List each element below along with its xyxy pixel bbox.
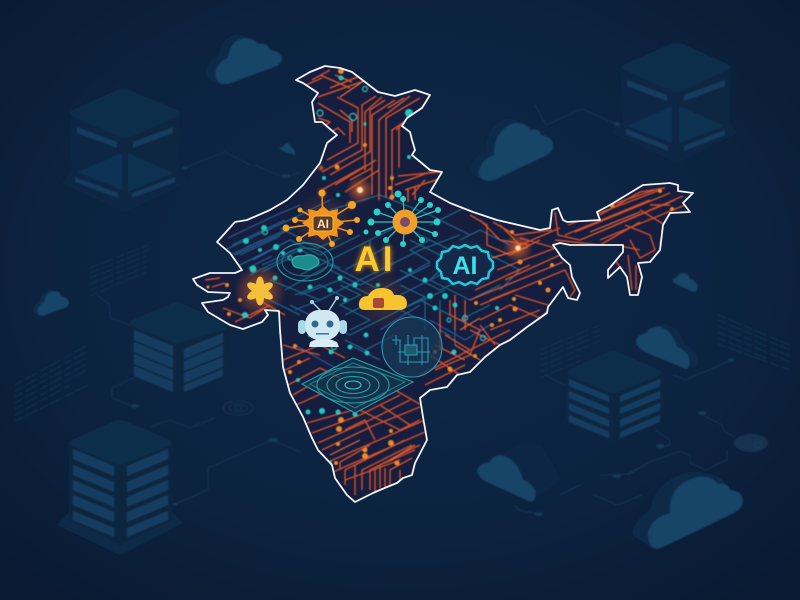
background server: top left [62, 89, 187, 212]
orange traces: western coast and south [205, 278, 430, 495]
background server: lower right [567, 351, 663, 443]
background server: middle left [130, 302, 227, 393]
ring circuit nodes [261, 85, 487, 351]
icon: teal network node with orange core [364, 190, 441, 247]
orange traces: east and north-east [420, 188, 685, 385]
glowing hot spots [316, 164, 533, 263]
orange circuit nodes [206, 68, 674, 466]
background cloud: left small [34, 290, 69, 316]
icon: brain circle [277, 243, 333, 281]
map of India [180, 60, 700, 510]
icon: isometric target chip [302, 358, 413, 413]
blue-cyan circuit traces: central and western [225, 195, 520, 350]
background disc: lower right [734, 434, 768, 452]
background cloud: right lower [636, 324, 698, 369]
icon: glowing flower [234, 265, 286, 317]
icon: orange AI chip with rays: AI [317, 217, 329, 231]
map outline [193, 66, 693, 502]
faint code text blocks [15, 245, 790, 421]
heading: large AI: AI [354, 240, 396, 279]
background server: bottom left [57, 420, 183, 555]
background cloud: top left [207, 35, 282, 84]
background cloud: lower right large [633, 472, 743, 549]
connector end dots [131, 122, 734, 516]
teal circuit nodes [242, 76, 499, 492]
icon: orange AI chip with rays [282, 190, 360, 253]
icon: robot head [298, 296, 347, 347]
orange traces: north [306, 70, 442, 202]
background server: top right [613, 43, 737, 163]
icon: cyan AI gear: AI [452, 252, 478, 280]
target disc [223, 401, 253, 415]
icon: cyan AI gear [433, 238, 497, 292]
background connector lines [97, 105, 735, 514]
background cloud: top centre [471, 119, 553, 181]
map interior fill [180, 60, 700, 510]
background cloud: lower centre [477, 444, 560, 502]
icon: circuit board circle [382, 317, 442, 377]
background cloud: tiny [279, 143, 295, 155]
background cloud: right small [673, 273, 698, 292]
icon: yellow cloud [355, 272, 411, 328]
circuit traces clipped to the map [205, 68, 685, 495]
bright orange accent traces [330, 80, 640, 460]
